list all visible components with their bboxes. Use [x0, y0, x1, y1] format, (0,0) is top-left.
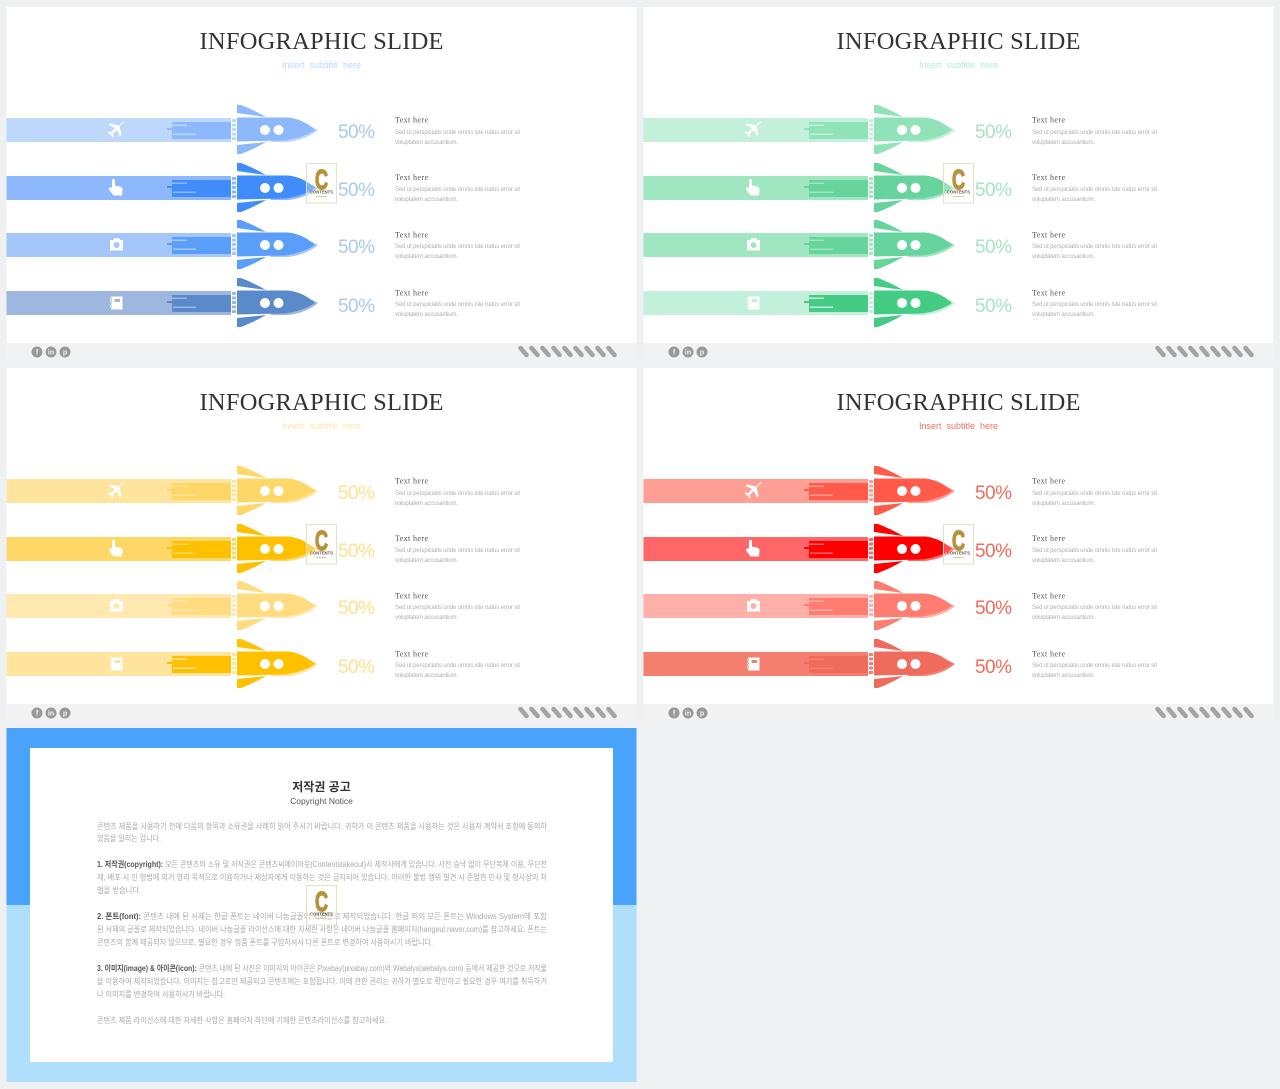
rocket row 3: voluptatem accusantium.: [1032, 615, 1095, 621]
footer bar: [644, 343, 1274, 360]
rocket row 3: voluptatem accusantium.: [1032, 254, 1095, 260]
rocket row 2: Text here: [395, 534, 428, 543]
notice body text: 콘텐츠 제품을 사용하기 전에 다음의 항목과 소유권을 사례히 읽어 주시기 바랍니다. 귀하가 이 콘텐츠 제품을 사용하는 것은 사용자 계약서 조항에 동의하: [97, 821, 548, 831]
rocket row 3: voluptatem accusantium.: [395, 254, 458, 260]
rocket row 1: voluptatem accusantium.: [1032, 501, 1095, 507]
rocket row 1: Sed ut perspiciatis unde omnis iste natus error sit: [1032, 491, 1157, 497]
rocket row 2: [644, 163, 1157, 212]
rocket row 3: 50%: [338, 237, 375, 258]
rocket row 1: Text here: [395, 476, 428, 486]
subtitle: Insert subtitle here: [282, 421, 361, 431]
notice body text: 콘텐츠 제품 라이선스에 대한 자세한 사항은 홈페이지 하단에 기재한 콘텐츠라이선스를 참고하세요.: [97, 1015, 387, 1025]
rocket row 3: Text here: [1032, 592, 1065, 600]
rocket row 1: 50%: [338, 122, 375, 143]
rocket row 4: 50%: [975, 296, 1012, 317]
rocket row 4: Sed ut perspiciatis unde omnis iste natus error sit: [395, 302, 520, 308]
rocket row 3: 50%: [338, 598, 375, 619]
footer bar: in: [48, 350, 54, 356]
rocket row 2: voluptatem accusantium.: [1032, 197, 1095, 203]
footer bar: [644, 704, 1274, 721]
title: INFOGRAPHIC SLIDE: [836, 28, 1080, 55]
notice subheading: Copyright Notice: [290, 796, 353, 806]
logo badge: [306, 164, 336, 203]
rocket row 4: Text here: [395, 288, 428, 298]
footer bar: [6, 343, 636, 360]
title: INFOGRAPHIC SLIDE: [200, 28, 444, 55]
rocket row 2: [6, 524, 520, 573]
panel: yellow slide: [6, 368, 636, 721]
footer bar: f: [36, 350, 39, 356]
footer bar: [6, 704, 636, 721]
rocket row 1: 50%: [975, 122, 1012, 143]
notice body text: 나 이미지를 변경하여 사용하시기 바랍니다.: [97, 989, 225, 999]
rocket row 2: 50%: [338, 180, 375, 201]
panel: copyright notice: [6, 728, 636, 1082]
rocket row 3: Text here: [395, 230, 428, 240]
rocket row 2: [6, 163, 520, 212]
rocket row 4: Sed ut perspiciatis unde omnis iste natus error sit: [1032, 302, 1157, 308]
rocket row 4: 50%: [338, 296, 375, 317]
rocket row 4: Text here: [1032, 650, 1065, 658]
rocket row 1: voluptatem accusantium.: [1032, 140, 1095, 146]
footer bar: in: [48, 710, 54, 718]
footer bar: p: [63, 350, 67, 356]
logo badge: [944, 164, 974, 203]
notice body text: 벌을 받습니다.: [97, 885, 141, 895]
rocket row 3: Sed ut perspiciatis unde omnis iste natus error sit: [1032, 244, 1157, 250]
footer bar: in: [685, 710, 691, 718]
footer bar: p: [700, 710, 704, 718]
rocket row 2: Sed ut perspiciatis unde omnis iste natus error sit: [395, 548, 520, 554]
rocket row 3: 50%: [975, 598, 1012, 619]
rocket row 1: Sed ut perspiciatis unde omnis iste natus error sit: [395, 130, 520, 136]
rocket row 2: voluptatem accusantium.: [395, 558, 458, 564]
rocket row 3: [6, 581, 520, 630]
rocket row 2: Text here: [1032, 173, 1065, 182]
notice body text: 1. 저작권(copyright): 모든 콘텐츠의 소유 및 저작권은 콘텐츠씨에이아웃(Contentstakeout)사 제작사에게 있습니다. 사전 승낙 없이 무단복제 이용, 무단전: [97, 859, 547, 869]
footer bar: in: [685, 350, 691, 356]
rocket row 3: Sed ut perspiciatis unde omnis iste natus error sit: [1032, 605, 1157, 611]
rocket row 3: [644, 581, 1157, 630]
rocket row 3: Sed ut perspiciatis unde omnis iste natus error sit: [395, 605, 520, 611]
logo badge: [306, 524, 336, 564]
rocket row 2: Text here: [395, 173, 428, 182]
title: INFOGRAPHIC SLIDE: [836, 389, 1080, 416]
rocket row 4: voluptatem accusantium.: [395, 673, 458, 679]
rocket row 1: [6, 105, 520, 154]
rocket row 1: 50%: [975, 483, 1012, 504]
rocket row 4: [6, 639, 520, 688]
subtitle: Insert subtitle here: [282, 60, 361, 70]
rocket row 2: [644, 524, 1157, 573]
panel: blue slide: [6, 7, 636, 360]
rocket row 1: voluptatem accusantium.: [395, 140, 458, 146]
footer bar: f: [673, 710, 676, 718]
rocket row 2: 50%: [975, 180, 1012, 201]
rocket row 3: Text here: [395, 592, 428, 600]
title: INFOGRAPHIC SLIDE: [200, 389, 444, 416]
notice heading: 저작권 공고: [292, 779, 351, 794]
subtitle: Insert subtitle here: [919, 60, 998, 70]
notice body text: 재, 배포 시 민 형법에 의거 영리 목적으로 이용하거나 제삼자에게 이용하는 것은 금지되어 있습니다. 이러한 불법 행위 발견 시 준엄한 민사 및 형사상의 처: [97, 872, 547, 882]
rocket row 3: [6, 220, 520, 269]
rocket row 1: Text here: [1032, 476, 1065, 486]
rocket row 4: Sed ut perspiciatis unde omnis iste natus error sit: [395, 663, 520, 669]
rocket row 4: [6, 278, 520, 327]
panel: red slide: [644, 368, 1274, 721]
rocket row 4: Sed ut perspiciatis unde omnis iste natus error sit: [1032, 663, 1157, 669]
subtitle: Insert subtitle here: [919, 421, 998, 431]
notice body text: 콘텐츠의 함께 제공되지 않으므로, 필요한 경우 정품 폰트를 구입하셔서 다른 폰트로 변경하여 사용하시기 바랍니다.: [97, 937, 433, 947]
rocket row 4: voluptatem accusantium.: [1032, 312, 1095, 318]
rocket row 1: Text here: [1032, 116, 1065, 124]
rocket row 3: voluptatem accusantium.: [395, 615, 458, 621]
notice body text: 였음을 알리는 겁니다.: [97, 833, 161, 843]
panel: green slide: [644, 7, 1274, 360]
rocket row 2: Sed ut perspiciatis unde omnis iste natus error sit: [1032, 187, 1157, 193]
footer bar: f: [36, 710, 39, 718]
notice body text: 을 이용하여 제작되었습니다. 이미지는 참고로만 제공되고 콘텐츠에는 포함됩니다. 이에 관한 권리는 귀하가 별도로 확인하고 필요한 경우 여기를 취득하거: [97, 976, 547, 986]
notice body text: 2. 폰트(font): 콘텐츠 내에 된 서체는 한글 폰트는 네이버 나눔글꼴의 서체들로 제작되었습니다. 한글 외의 모든 폰트는 Windows System에 포함: [97, 911, 548, 921]
rocket row 4: 50%: [338, 657, 375, 678]
logo badge: [944, 524, 974, 564]
rocket row 2: Sed ut perspiciatis unde omnis iste natus error sit: [1032, 548, 1157, 554]
rocket row 2: Sed ut perspiciatis unde omnis iste natus error sit: [395, 187, 520, 193]
rocket row 1: 50%: [338, 483, 375, 504]
rocket row 4: [644, 639, 1157, 688]
rocket row 1: [644, 105, 1157, 154]
notice body text: 3. 이미지(image) & 아이콘(icon): 콘텐츠 내에 된 사진은 이미지의 아이콘은 Pixabay(pixabay.com)와 Webalys(webalys.com) 등에서 제공한 것으로 저작물: [97, 963, 547, 973]
logo badge: [306, 886, 336, 925]
footer bar: p: [63, 710, 67, 718]
rocket row 4: [644, 278, 1157, 327]
rocket row 4: voluptatem accusantium.: [1032, 673, 1095, 679]
rocket row 1: voluptatem accusantium.: [395, 501, 458, 507]
notice body text: [97, 821, 548, 1025]
rocket row 2: Text here: [1032, 534, 1065, 543]
rocket row 3: 50%: [975, 237, 1012, 258]
rocket row 4: Text here: [1032, 288, 1065, 298]
rocket row 4: Text here: [395, 650, 428, 658]
rocket row 3: Text here: [1032, 230, 1065, 240]
rocket row 4: voluptatem accusantium.: [395, 312, 458, 318]
rocket row 3: [644, 220, 1157, 269]
rocket row 3: Sed ut perspiciatis unde omnis iste natus error sit: [395, 244, 520, 250]
rocket row 2: voluptatem accusantium.: [1032, 558, 1095, 564]
rocket row 2: 50%: [338, 541, 375, 562]
notice body text: 된 서체의 글꼴로 제작되었습니다. 네이버 나눔글꼴 라이선스에 대한 자세한 사항은 네이버 나눔글꼴 홈페이지(hangeul.naver.com)를 참고하세요. 폰트는: [97, 924, 547, 934]
rocket row 1: [644, 466, 1157, 515]
rocket row 2: voluptatem accusantium.: [395, 197, 458, 203]
rocket row 4: 50%: [975, 657, 1012, 678]
rocket row 1: Sed ut perspiciatis unde omnis iste natus error sit: [395, 491, 520, 497]
rocket row 1: Sed ut perspiciatis unde omnis iste natus error sit: [1032, 130, 1157, 136]
rocket row 2: 50%: [975, 541, 1012, 562]
footer bar: p: [700, 350, 704, 356]
rocket row 1: [6, 466, 520, 515]
footer bar: f: [673, 350, 676, 356]
rocket row 1: Text here: [395, 116, 428, 124]
